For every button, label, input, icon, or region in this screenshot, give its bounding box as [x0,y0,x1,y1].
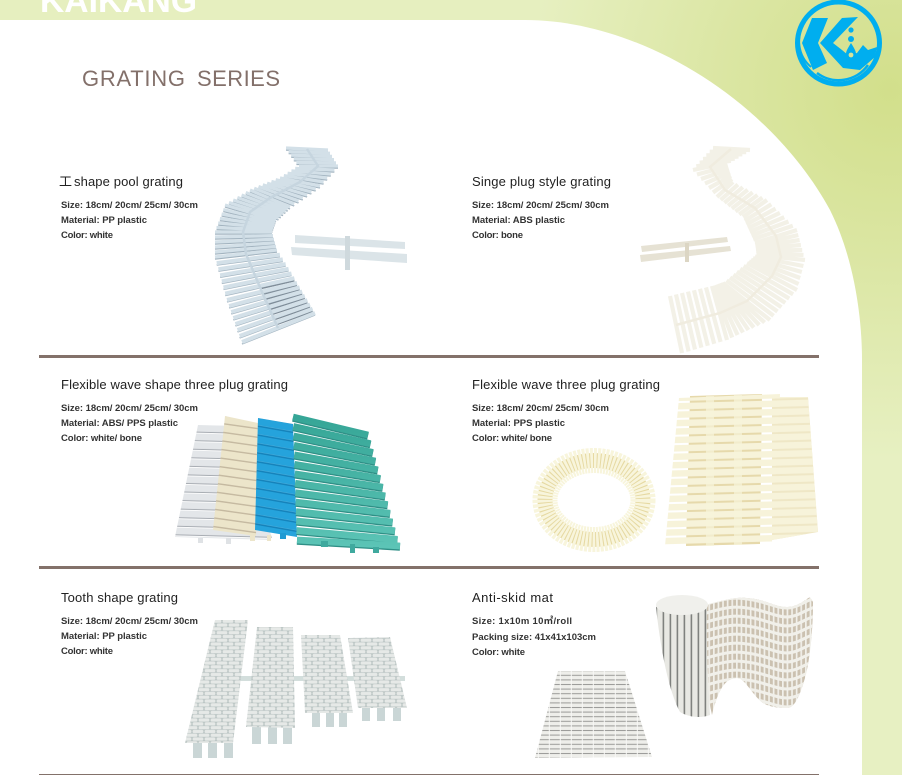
specifications [61,616,198,657]
heading: 工 [59,174,72,189]
gray sheet [175,425,272,544]
heading: Tooth shape grating [61,590,178,605]
specifications: Color: bone [472,230,523,241]
product image: four coloured grating sheets [175,416,400,553]
teal sheet [293,417,400,553]
product image: ivory grating sheets [665,394,818,546]
specifications: Size: 18cm/ 20cm/ 25cm/ 30cm [472,403,609,414]
panel: single plug style grating [472,148,805,353]
specifications: Color: white/ bone [472,433,552,444]
heading: shape pool grating [74,174,183,189]
product image: wavy rolled mat [656,595,813,717]
heading: Flexible wave shape three plug grating [61,377,288,392]
heading: Anti-skid mat [472,590,553,605]
product image: curved blue-white grating [215,148,407,344]
specifications: Size: 18cm/ 20cm/ 25cm/ 30cm [61,403,198,414]
specifications: Size: 18cm/ 20cm/ 25cm/ 30cm [472,200,609,211]
specifications: Size: 1x10m 10㎡/roll [472,616,572,627]
product image: flat mat [535,671,652,758]
title: GRATING [82,66,185,91]
product image: tooth grating pieces [185,620,407,758]
specifications: Material: ABS/ PPS plastic [61,418,178,429]
panel: tooth shape grating [61,590,407,758]
panel: flexible wave shape three plug grating [61,377,400,553]
panel: I shape pool grating [59,148,407,344]
specifications: Material: PP plastic [61,631,147,642]
specifications [61,403,198,444]
product image: curved bone grating [640,148,805,353]
specifications [472,200,609,241]
specifications: Material: PPS plastic [472,418,565,429]
specifications: Size: 18cm/ 20cm/ 25cm/ 30cm [61,616,198,627]
blue sheet [255,418,297,539]
specifications: Material: ABS plastic [472,215,565,226]
specifications [61,200,198,241]
divider lines [39,355,819,775]
panel: flexible wave three plug grating [472,377,818,546]
specifications [472,403,609,444]
heading: Singe plug style grating [472,174,611,189]
specifications: Material: PP plastic [61,215,147,226]
product image: grating ring [545,460,643,540]
specifications: Color: white/ bone [61,433,142,444]
specifications: Color: white [472,647,525,658]
heading: Flexible wave three plug grating [472,377,660,392]
specifications: Color: white [61,646,113,657]
specifications: Size: 18cm/ 20cm/ 25cm/ 30cm [61,200,198,211]
title: SERIES [197,66,280,91]
specifications [472,616,596,658]
logo: blue circle with K and water drops [798,2,880,84]
panel: anti-skid mat [472,590,820,758]
specifications: Packing size: 41x41x103cm [472,632,596,643]
beige sheet [213,416,271,541]
specifications: Color: white [61,230,113,241]
